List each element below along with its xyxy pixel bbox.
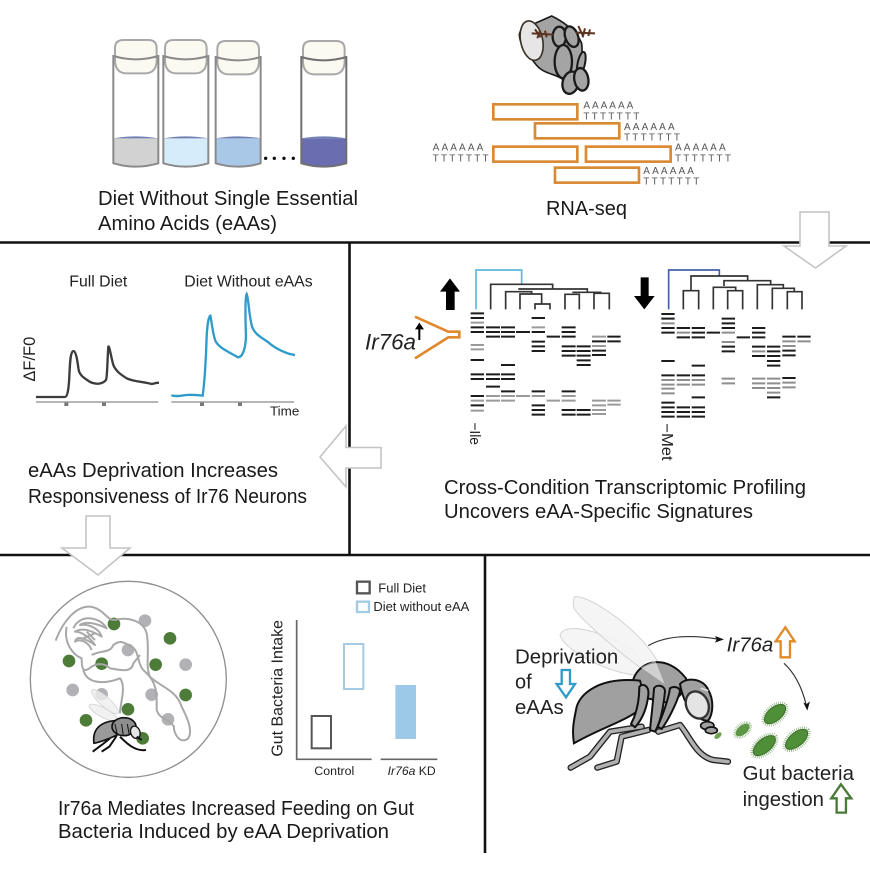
Ir76a gene label: Ir76a (365, 329, 416, 354)
panel: diet vials (113, 40, 346, 167)
poly-A and poly-T labels: TTTTTTT (643, 176, 699, 187)
green bacteria dots (63, 618, 192, 745)
vial: pale blue diet (163, 40, 208, 167)
poly-A and poly-T labels: AAAAAA (583, 100, 634, 111)
icon: orange up arrow (776, 627, 795, 657)
icon: blue down arrow (557, 670, 575, 697)
x labels: Ir76a KD (388, 764, 436, 778)
arrow: to profiling (784, 212, 846, 268)
poly-A and poly-T labels: AAAAAA (624, 122, 675, 133)
text: responsiveness caption: eAAs Deprivation Increases (28, 460, 278, 482)
heatmap: black marks (661, 314, 811, 417)
trace labels: ΔF/F0 (20, 337, 39, 382)
transcript bars (493, 104, 671, 183)
poly-A and poly-T labels: TTTTTTT (675, 153, 731, 164)
panel: -Ile heatmap (365, 270, 621, 445)
y axis label: Gut Bacteria Intake (270, 620, 287, 757)
bar: Ir76a KD (395, 685, 416, 739)
bar: control without eAA (344, 644, 363, 689)
icon: small fly (87, 686, 146, 752)
poly-A and poly-T labels (433, 100, 731, 187)
chart axes (297, 620, 437, 759)
text: diet caption: Amino Acids (eAAs) (98, 213, 277, 235)
text: gut bacteria ingestion (743, 763, 855, 811)
text: gut bacteria ingestion: ingestion (743, 789, 824, 811)
fly legs (571, 725, 728, 768)
vial: dark blue diet (301, 41, 346, 167)
bacteria cluster (713, 698, 813, 762)
text: profiling caption (444, 477, 806, 523)
Ir76a label: Ir76a (727, 635, 773, 657)
trace labels: Full Diet (69, 274, 128, 291)
fly wings (560, 597, 665, 683)
panel: RNA-seq (433, 16, 731, 187)
arrow: Ir76a to bacteria (784, 663, 810, 711)
poly-A and poly-T labels: AAAAAA (643, 166, 694, 177)
vial: gray diet (113, 40, 158, 167)
dendrogram (669, 270, 802, 309)
text: deprivation of eAAs: eAAs (515, 697, 564, 719)
panel: model fly (515, 597, 855, 813)
icon: small up arrow (415, 323, 424, 340)
poly-A and poly-T labels: TTTTTTT (624, 132, 680, 143)
vial: medium blue diet (216, 41, 261, 167)
text: profiling caption: Cross-Condition Transcriptomic Profiling (444, 477, 806, 499)
ellipsis dots (264, 157, 295, 160)
-Met label: −Met (658, 423, 675, 461)
icon: fly head (517, 16, 595, 96)
poly-A and poly-T labels: TTTTTTT (433, 153, 489, 164)
heatmap: gray marks (661, 323, 811, 393)
text: gut bacteria ingestion: Gut bacteria (743, 763, 855, 785)
trace labels: Time (270, 404, 299, 419)
gray bacteria dots (66, 614, 192, 726)
text: responsiveness caption (28, 460, 307, 508)
text: deprivation of eAAs (515, 646, 618, 719)
dish outline (30, 581, 226, 777)
text: deprivation of eAAs: Deprivation (515, 646, 618, 668)
-Ile label: −Ile (466, 422, 482, 445)
legend: full diet (357, 581, 426, 596)
text: RNA-seq caption: RNA-seq (546, 198, 627, 220)
heatmap: gray marks (471, 323, 621, 414)
text: diet caption (98, 188, 358, 235)
axis baselines (36, 400, 294, 404)
text: feeding caption (58, 798, 414, 843)
trace: diet without eAAs (171, 294, 295, 396)
legend: full diet: Full Diet (378, 581, 426, 596)
stimulus ticks (64, 403, 242, 406)
trace: full diet (36, 346, 159, 397)
icon: orange receptor (415, 317, 459, 358)
text: deprivation of eAAs: of (515, 671, 532, 693)
text: profiling caption: Uncovers eAA-Specific Signatures (444, 501, 753, 523)
poly-A and poly-T labels: AAAAAA (433, 143, 484, 154)
trace labels (20, 274, 313, 419)
legend: diet without eAA: Diet without eAA (373, 599, 470, 614)
arrow: to feeding assay (62, 516, 130, 575)
fly walking trail (56, 607, 190, 740)
icon: big down arrow (634, 277, 655, 309)
wing overlay on thorax (641, 661, 665, 684)
fly abdomen (573, 680, 642, 743)
poly-A and poly-T labels: TTTTTTT (583, 111, 639, 122)
panel: -Met heatmap (634, 270, 811, 461)
trace labels: Diet Without eAAs (184, 274, 313, 291)
panel: petri dish (30, 581, 226, 777)
fly leg segments (631, 685, 680, 732)
arrow: fly to Ir76a (648, 636, 724, 646)
x labels (314, 764, 436, 778)
text: responsiveness caption: Responsiveness of Ir76 Neurons (28, 486, 307, 508)
panel: gut bacteria bar chart (270, 581, 470, 778)
poly-A and poly-T labels: AAAAAA (675, 143, 726, 154)
text: diet caption: Diet Without Single Essential (98, 188, 358, 210)
bar: control full diet (312, 716, 331, 748)
icon: green up arrow (831, 784, 851, 813)
fly thorax (633, 662, 686, 703)
heatmap: black marks (471, 313, 621, 415)
fly head (680, 680, 717, 734)
panel: calcium traces (20, 274, 313, 419)
text: feeding caption: Ir76a Mediates Increased Feeding on Gut (58, 798, 414, 820)
text: feeding caption: Bacteria Induced by eAA Deprivation (58, 821, 389, 843)
arrow: to responsiveness (320, 426, 381, 487)
x labels: Control (314, 764, 354, 778)
icon: big up arrow (440, 278, 460, 310)
dendrogram (476, 270, 609, 309)
